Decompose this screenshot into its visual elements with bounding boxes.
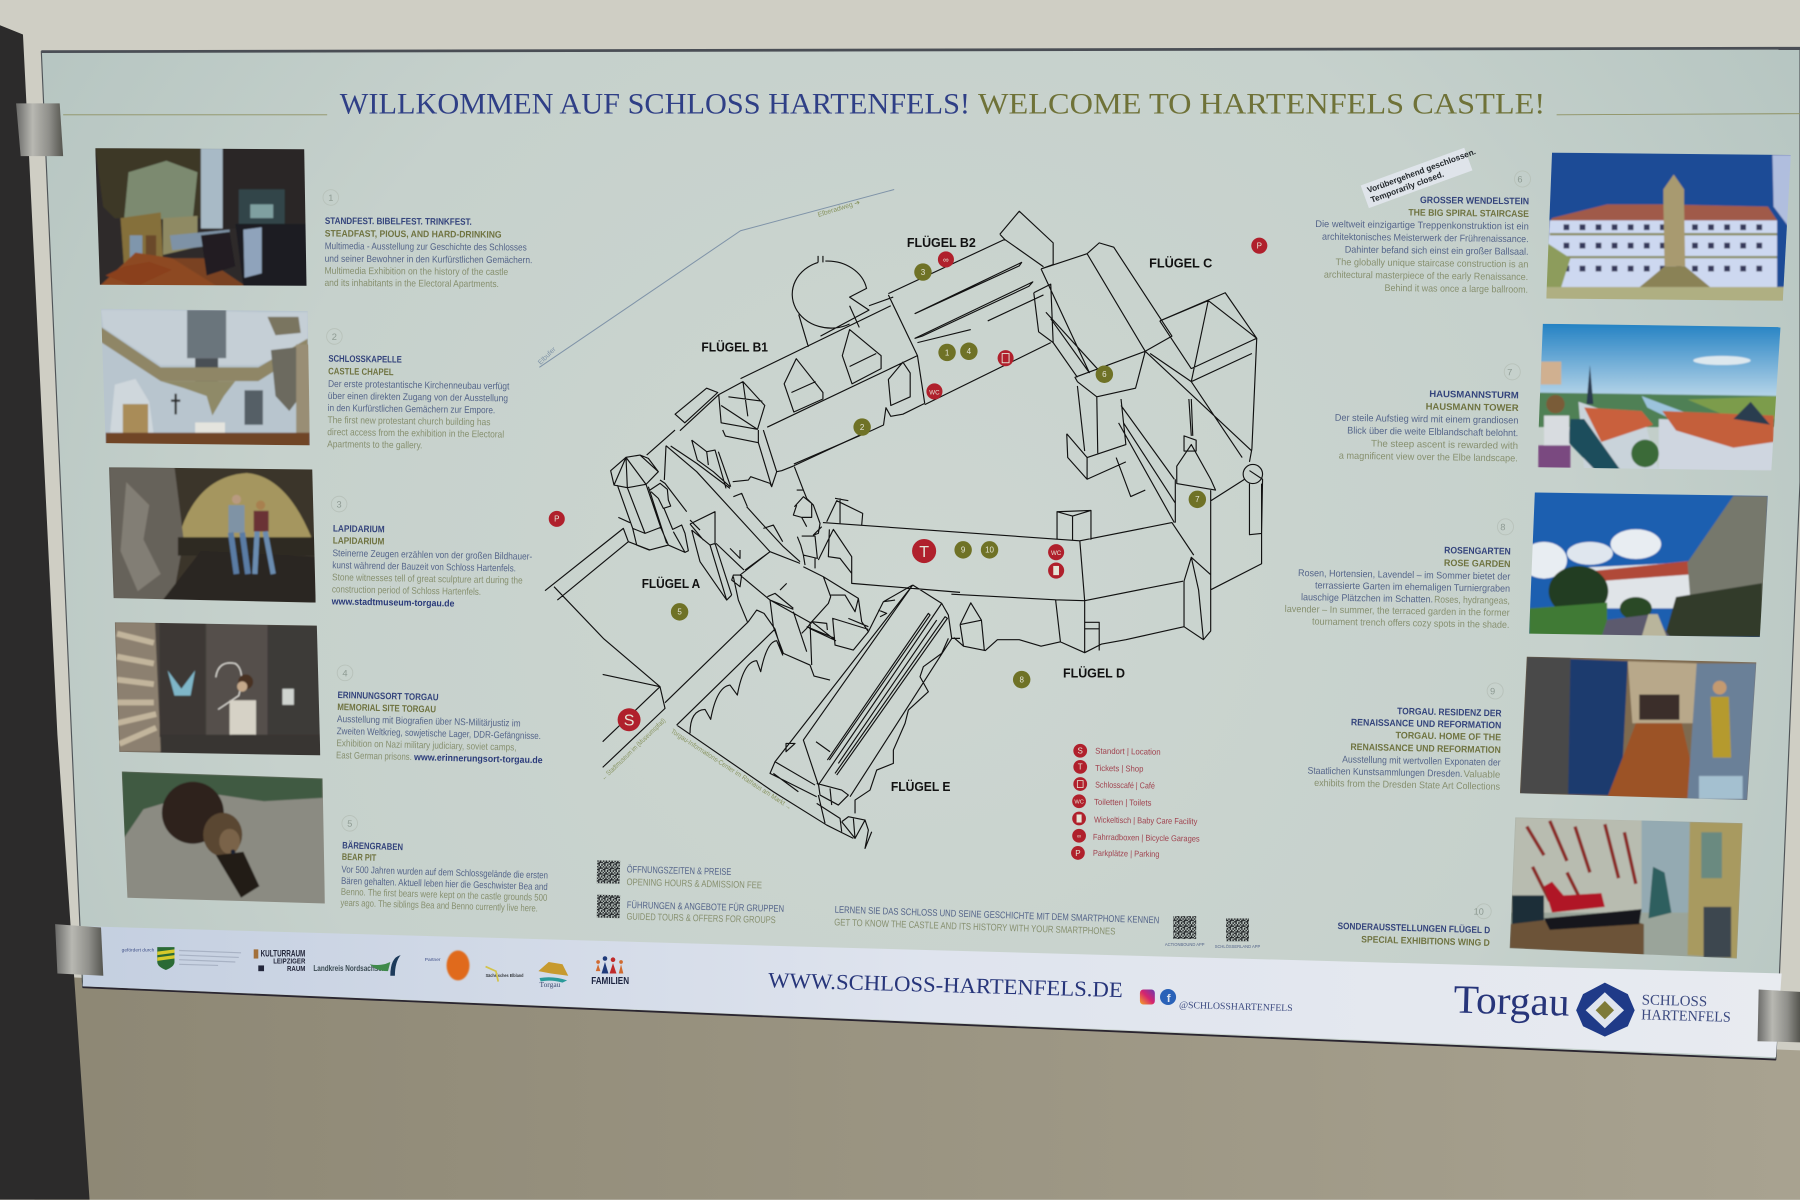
text block 5 [339,815,550,915]
text block 4 [335,665,545,766]
text block 8: ROSENGARTEN [1444,544,1511,556]
text block 9: RENAISSANCE UND REFORMATION [1351,716,1502,730]
marker 6 [1096,366,1113,383]
icon: facebook [1160,989,1176,1005]
clip: top left [16,103,63,156]
partner label: Partner [425,957,441,963]
photo 10: special exhibitions [1506,815,1747,964]
Kulturraum Leipziger Raum [254,948,306,973]
text block 3: kunst während der Bauzeit von Schloss Hartenfels. [332,560,516,574]
text block 2: in den Kurfürstlichen Gemächern zur Empore. [328,403,495,416]
item number 4: 4 [342,668,348,678]
marker 2: 2 [860,423,865,432]
item number 2 [326,329,342,344]
text block 7: a magnificent view over the Elbe landscape. [1339,451,1518,464]
photo 8: rose garden [1521,491,1774,641]
Saxony shield [157,947,174,970]
text block 3 [330,496,533,610]
app QR: Actionbound [1165,916,1205,947]
partner logo gold [486,967,524,982]
item number 2: 2 [332,332,337,342]
marker 4 [960,343,978,360]
Schloss Hartenfels wordmark: SCHLOSS [1641,992,1707,1010]
item number 3: 3 [336,499,342,510]
closure sticker [1361,145,1481,208]
app QR: Schlösserland [1215,918,1261,949]
sign top edge [41,48,1800,52]
legend: bicycle: Fahrradboxen | Bicycle Garages [1093,832,1200,844]
clip: bottom left [55,924,103,976]
wing D: FLÜGEL D [1063,665,1125,680]
marker 5 [671,603,688,621]
text block 10: SPECIAL EXHIBITIONS WING D [1361,933,1490,948]
item number 7 [1504,364,1520,380]
marker cafe [998,350,1014,366]
map caption: Stadtmuseum: ← Stadtmuseum im (Museumspfad) [600,717,667,782]
marker wc north [926,383,942,399]
text block 6: Behind it was once a large ballroom. [1384,283,1528,296]
Kulturraum Leipziger Raum: RAUM [287,964,305,973]
item number 6 [1514,171,1531,187]
text block 4: Exhibition on Nazi military judiciary, soviet camps, [336,738,517,754]
app QR: Actionbound: ACTIONBOUND APP [1165,942,1205,947]
text block 9: Staatlichen Kunstsammlungen Dresden. [1307,766,1463,780]
marker wc north: WC [929,389,940,396]
guided tours QR and text: GUIDED TOURS & OFFERS FOR GROUPS [626,912,776,926]
legend: location [1073,744,1161,758]
text block 6: Die weltweit einzigartige Treppenkonstruktion ist ein [1315,219,1529,233]
text block 4: www.erinnerungsort-torgau.de [413,751,543,765]
marker 6: 6 [1102,370,1107,379]
text block 6 [1314,168,1531,296]
text block 3: www.stadtmuseum-torgau.de [331,595,455,609]
text block 5: Bären gehalten. Aktuell leben hier die Geschwister Bea and [341,876,548,893]
castle: wing A, E and courtyard [545,430,960,848]
marker tickets: T [919,543,929,561]
item number 6: 6 [1517,174,1523,184]
text block 8 [1284,515,1514,631]
opening hours QR and text: OPENING HOURS & ADMISSION FEE [626,877,762,891]
wing A: FLÜGEL A [642,576,700,591]
text block 5: Benno. The first bears were kept on the castle grounds 500 [341,887,547,904]
marker 5: 5 [677,608,682,617]
guided tours QR and text [597,895,784,926]
title German: WILLKOMMEN AUF SCHLOSS HARTENFELS! [340,88,970,121]
castle plan drawing [539,190,1263,848]
item number 8 [1497,519,1514,535]
photo 4: memorial site [109,620,327,758]
Kulturraum Leipziger Raum: LEIPZIGER [273,957,306,966]
castle: north and east wings [539,190,1263,653]
item number 9: 9 [1490,686,1495,696]
text block 7: The steep ascent is rewarded with [1371,439,1518,452]
Torgau town logo: Torgau [540,980,561,989]
text block 3: Steinerne Zeugen erzählen von der großen Bildhauer- [332,548,532,563]
wing B2: FLÜGEL B2 [907,235,976,250]
text block 9 [1307,679,1503,793]
opening hours QR and text: ÖFFNUNGSZEITEN & PREISE [627,864,731,878]
mounting post [0,25,90,1200]
text block 8: Roses, hydrangeas, [1434,594,1510,607]
item number 10: 10 [1473,906,1484,917]
legend: toilets: WC [1074,800,1084,806]
marker wc south: WC [1051,550,1062,557]
Kulturraum Leipziger Raum: KULTURRAUM [261,948,306,958]
text block 1: STEADFAST, PIOUS, AND HARD-DRINKING [325,227,502,240]
wing C: FLÜGEL C [1149,255,1212,270]
sponsor label: gefördert durch [122,948,155,954]
wing labels [642,235,1212,794]
Familien logo [591,956,629,987]
legend: toilets [1072,794,1152,808]
text block 9: TORGAU. RESIDENZ DER [1397,705,1502,718]
wall: lower taupe plaster [34,976,1800,1200]
marker 8: 8 [1019,675,1024,684]
legend: parking: P [1075,849,1081,858]
text block 9: RENAISSANCE UND REFORMATION [1350,741,1501,755]
icon: facebook: f [1167,993,1171,1005]
item number 1: 1 [328,193,333,203]
marker bicycle [938,251,954,267]
text block 5: years ago. The siblings Bea and Benno currently live here. [340,898,538,915]
marker 10 [981,541,998,559]
crest logo [1576,983,1635,1037]
text block 5: BEAR PIT [342,851,377,863]
marker 1: 1 [945,348,950,357]
opening hours QR and text [597,860,762,891]
text block 2: CASTLE CHAPEL [328,365,394,377]
text block 10 [1337,900,1491,948]
castle outline: B, C and D wings [675,211,1263,653]
text block 9: Ausstellung mit wertvollen Exponaten der [1342,754,1501,769]
text block 2 [325,329,510,453]
marker 3 [914,263,932,281]
text block 9: Valuable [1463,769,1500,781]
item number 4 [337,665,353,681]
text block 6: The globally unique staircase construction is an [1335,257,1528,270]
Familien logo: FAMILIEN [591,976,629,987]
text block 4: Ausstellung mit Biografien über NS-Militärjustiz im [337,714,521,730]
text block 1: Multimedia Exhibition on the history of the castle [325,266,508,278]
marker 1 [938,344,956,361]
closure sticker: Temporarily closed. [1369,170,1445,205]
bottom white strip [83,926,1782,1057]
Torgau wordmark: Torgau [1453,977,1570,1025]
item number 10 [1473,904,1491,919]
item number 9 [1487,683,1503,699]
photo 1: exhibition interior [95,148,306,286]
text block 8: terrassierte Garten im ehemaligen Turniergraben [1315,580,1510,595]
map legend [1071,744,1200,860]
text block 6: GROSSER WENDELSTEIN [1420,194,1529,206]
marker parking west [549,511,565,527]
Landkreis Nordsachsen: Landkreis Nordsachsen [313,964,386,973]
item number 1 [323,190,339,205]
Landkreis Nordsachsen [313,955,401,976]
legend: baby care: Wickeltisch | Baby Care Facility [1094,815,1198,826]
item number 5 [342,815,358,831]
marker 9 [954,541,972,559]
legend: tickets: Tickets | Shop [1095,763,1144,774]
text block 7: Blick über die weite Elblandschaft belohnt. [1347,426,1518,439]
photo 9: Torgau Residenz exhibition [1515,654,1762,804]
marker 3: 3 [921,268,926,277]
text block 9: TORGAU. HOME OF THE [1395,729,1501,742]
text block 7 [1334,361,1520,464]
photo 3: lapidarium [109,467,316,603]
marker 2 [853,418,871,436]
smartphone text: LERNEN SIE DAS SCHLOSS UND SEINE GESCHICHTE MIT DEM SMARTPHONE KENNEN [834,905,1160,926]
map caption: Elbufer: Elbufer [537,346,558,366]
text block 2: SCHLOSSKAPELLE [328,353,402,365]
text block 7: Der steile Aufstieg wird mit einem grandiosen [1335,413,1518,427]
clip: bottom right [1758,990,1800,1042]
app QR: Schlösserland: SCHLÖSSERLAND APP [1215,944,1261,949]
Schloss Hartenfels wordmark: HARTENFELS [1641,1007,1731,1026]
Elbe path line [539,190,894,367]
text block 6: architectural masterpiece of the early Renaissance. [1324,270,1528,283]
text block 3: LAPIDARIUM [333,523,385,534]
text block 1: and its inhabitants in the Electoral Apartments. [324,278,499,290]
marker 7: 7 [1195,495,1200,504]
text block 8: lavender – In summer, the terraced garden in the former [1285,604,1511,619]
marker location [618,708,641,731]
item number 7: 7 [1507,367,1512,377]
marker baby care [1048,563,1064,579]
Schloss Hartenfels wordmark [1641,992,1731,1026]
marker parking east: P [1257,242,1262,251]
partner logo gold: Sächsisches Elbland [486,973,524,978]
marker parking east [1251,238,1267,254]
round corner tower cap [1243,464,1263,484]
sponsors row [122,947,629,989]
text block 6: architektonisches Meisterwerk der Frührenaissance. [1322,232,1529,245]
marker 10: 10 [985,546,995,555]
photo 2: castle chapel [98,304,316,448]
legend: tickets [1073,760,1144,774]
text block 3: Stone witnesses tell of great sculpture art during the [332,572,523,587]
legend: location: Standort | Location [1095,746,1161,757]
legend: cafe: Schlosscafé | Café [1095,780,1155,791]
text block 4: Zweiten Weltkrieg, sowjetische Lager, DDR-Gefängnisse. [337,726,541,742]
map caption: Torgau Information Center: Torgau-Informations-Center im Rathaus am Markt → [669,728,793,812]
text block 8: tournament trench offers cozy spots in the shade. [1312,616,1510,631]
guided tours QR and text: FÜHRUNGEN & ANGEBOTE FÜR GRUPPEN [627,900,784,915]
wing B1: FLÜGEL B1 [701,339,768,354]
text block 2: über einen direkten Zugang von der Ausstellung [328,391,508,404]
text block 3: LAPIDARIUM [333,535,385,546]
text block 6: THE BIG SPIRAL STAIRCASE [1408,206,1529,219]
text block 2: direct access from the exhibition in the Electoral [327,427,504,441]
marker 9: 9 [961,546,966,555]
marker 4: 4 [967,347,972,356]
text block 8: Rosen, Hortensien, Lavendel – im Sommer bietet der [1298,568,1511,583]
legend: bicycle [1072,829,1200,844]
item number 3 [331,496,347,512]
QR code: tours [597,895,620,918]
social handle: @SCHLOSSHARTENFELS [1179,1000,1293,1014]
map caption: Elberadweg: Elberadweg ➔ [817,199,861,219]
legend: location: S [1078,747,1083,756]
item number 8: 8 [1500,522,1506,532]
text block 1: und seiner Bewohner in den Kurfürstlichen Gemächern. [325,254,532,266]
photo 7: tower view [1533,321,1785,471]
icon: instagram [1140,990,1155,1004]
smartphone text [834,905,1160,939]
marker parking west: P [554,515,559,524]
marker 8 [1013,671,1030,688]
title English: WELCOME TO HARTENFELS CASTLE! [978,88,1545,121]
closure sticker: Vorübergehend geschlossen. [1366,147,1477,195]
title [340,88,1545,121]
Torgau town logo [538,962,568,989]
text block 5: BÄRENGRABEN [342,839,403,852]
legend: parking [1071,846,1160,860]
sponsor fine print lines [179,951,241,965]
item number 5: 5 [347,819,352,829]
photo 5: bear [122,772,325,904]
text block 1 [322,190,533,290]
marker location: S [624,712,634,730]
text block 1: STANDFEST. BIBELFEST. TRINKFEST. [325,215,472,227]
legend: tickets: T [1078,763,1083,772]
text block 5: Vor 500 Jahren wurden auf dem Schlossgelände die ersten [341,864,548,882]
orange partner logo [447,951,470,980]
QR code: opening hours [597,860,620,884]
text block 2: Der erste protestantische Kirchenneubau verfügt [328,379,510,392]
legend: bicycle: ∞ [1077,834,1081,840]
wing E: FLÜGEL E [891,779,951,794]
text block 3: construction period of Schloss Hartenfels. [332,584,481,598]
text block 7: HAUSMANN TOWER [1426,401,1519,413]
text block 8: lauschige Plätzchen im Schatten. [1301,592,1433,605]
text block 10: SONDERAUSSTELLUNGEN FLÜGEL D [1337,920,1490,935]
map markers [549,238,1267,731]
text block 9: exhibits from the Dresden State Art Collections [1314,778,1500,793]
text block 2: The first new protestant church building has [327,415,491,428]
text block 6: Dahinter befand sich einst ein großer Ballsaal. [1345,245,1529,258]
smartphone text: GET TO KNOW THE CASTLE AND ITS HISTORY WITH YOUR SMARTPHONES [834,917,1116,938]
legend: toilets: Toiletten | Toilets [1094,797,1152,808]
sign bottom edge [83,987,1776,1060]
text block 2: Apartments to the gallery. [327,439,423,451]
legend: parking: Parkplätze | Parking [1093,848,1160,859]
text block 1: Multimedia - Ausstellung zur Geschichte des Schlosses [325,241,527,254]
website URL: WWW.SCHLOSS-HARTENFELS.DE [768,968,1123,1002]
marker tickets [912,539,936,563]
text block 4: East German prisons. [336,750,412,763]
text block 8: ROSE GARDEN [1444,557,1511,569]
text block 7: HAUSMANNSTURM [1429,388,1519,400]
text block 4: MEMORIAL SITE TORGAU [337,701,436,714]
marker bicycle: ∞ [943,255,949,264]
photo 6: castle courtyard with spiral staircase [1538,149,1797,304]
marker 7 [1189,491,1206,508]
text block 4: ERINNUNGSORT TORGAU [337,689,439,702]
marker wc south [1048,544,1064,560]
